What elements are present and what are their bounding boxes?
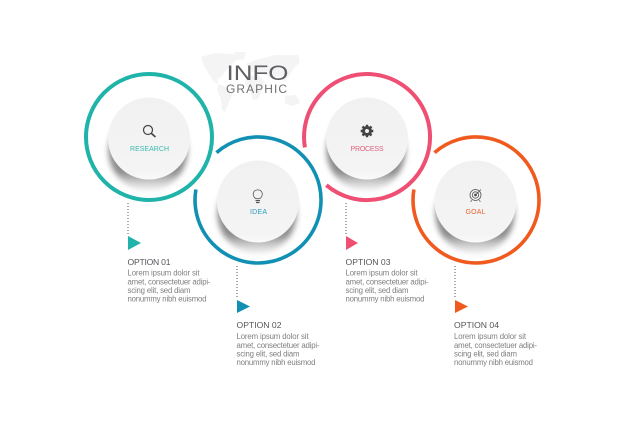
ring: blue — [195, 137, 321, 263]
arrow: teal — [128, 236, 141, 250]
disc shadow — [326, 112, 406, 190]
disc — [108, 98, 190, 180]
text block: option 03 — [346, 257, 429, 304]
step 4: goal — [413, 137, 539, 263]
arrow: orange — [455, 300, 468, 313]
ring: orange — [413, 137, 539, 263]
disc shadow — [108, 112, 188, 190]
connector: option 04 — [455, 266, 468, 313]
text block: option 03: scing elit, sed diam — [346, 286, 408, 295]
text block: option 04: OPTION 04 — [454, 320, 499, 330]
disc — [217, 160, 299, 242]
text block: option 03: OPTION 03 — [346, 257, 391, 267]
text block: option 01: OPTION 01 — [128, 257, 171, 267]
title — [226, 62, 288, 96]
text block: option 03: amet, consectetuer adipi- — [346, 278, 429, 286]
icon: target — [470, 190, 481, 202]
text block: option 01: scing elit, sed diam — [128, 286, 190, 295]
text block: option 02: scing elit, sed diam — [236, 350, 300, 358]
world map background — [201, 52, 300, 112]
text block: option 01 — [128, 257, 211, 304]
label: RESEARCH — [130, 146, 169, 153]
text block: option 04: nonummy nibh euismod — [454, 358, 533, 367]
text block: option 01: Lorem ipsum dolor sit — [128, 268, 200, 278]
connector: option 03 — [346, 203, 358, 250]
connector: option 02 — [237, 266, 250, 313]
text block: option 04 — [454, 320, 537, 367]
text block: option 04: Lorem ipsum dolor sit — [454, 332, 527, 341]
disc shadow — [436, 174, 514, 254]
ring: teal — [86, 74, 212, 200]
step 2: idea — [195, 137, 321, 263]
disc — [326, 98, 408, 180]
text block: option 02: OPTION 02 — [236, 320, 282, 330]
ring: pink — [304, 74, 430, 200]
label: PROCESS — [350, 146, 384, 153]
text block: option 04: amet, consectetuer adipi- — [454, 341, 537, 350]
label: GOAL — [466, 209, 486, 216]
icon: magnifier — [144, 126, 156, 137]
title: GRAPHIC — [226, 82, 287, 96]
title: INFO — [226, 62, 288, 85]
label: IDEA — [250, 209, 267, 216]
step 1: research — [86, 74, 212, 200]
arrow: pink — [346, 236, 358, 250]
text block: option 01: nonummy nibh euismod — [128, 294, 206, 304]
icon: light bulb — [253, 190, 262, 202]
connector: option 01 — [128, 203, 141, 250]
text block: option 02 — [236, 320, 320, 367]
arrow: blue — [237, 300, 250, 313]
text block: option 03: Lorem ipsum dolor sit — [346, 268, 418, 278]
text block: option 03: nonummy nibh euismod — [346, 294, 424, 304]
disc shadow — [218, 174, 296, 254]
text block: option 04: scing elit, sed diam — [454, 350, 517, 358]
icon: gear — [361, 125, 373, 137]
text block: option 02: nonummy nibh euismod — [236, 358, 316, 367]
text block: option 01: amet, consectetuer adipi- — [128, 278, 211, 286]
disc — [434, 160, 516, 242]
text block: option 02: Lorem ipsum dolor sit — [236, 332, 309, 341]
text block: option 02: amet, consectetuer adipi- — [236, 341, 320, 350]
step 3: process — [304, 74, 430, 200]
